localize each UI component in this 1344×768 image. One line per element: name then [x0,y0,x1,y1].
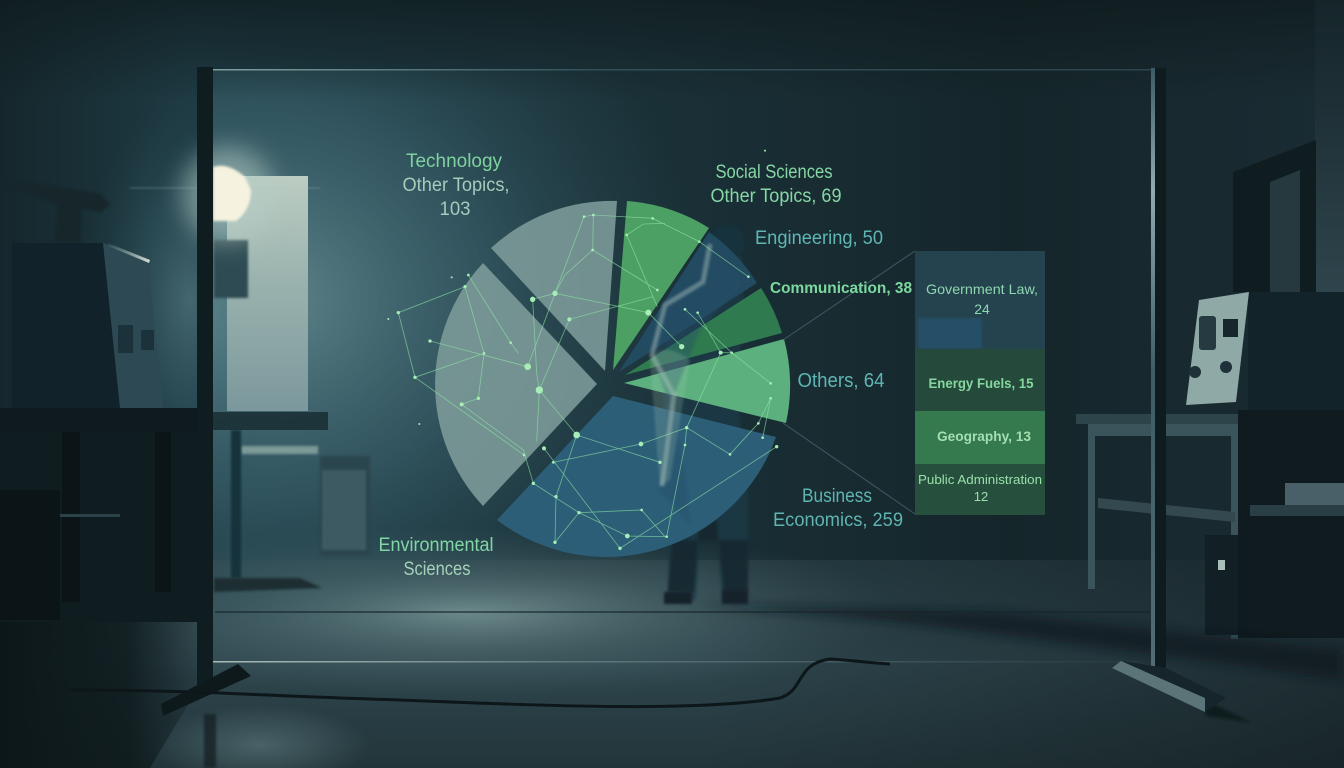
bin [1205,535,1238,635]
table top [1076,414,1246,424]
label: Business Economics: Economics, 259 [773,510,903,531]
right foot dark end [1122,661,1226,712]
space under desk [0,432,197,622]
right equipment [1076,0,1344,639]
slice: Social Sciences Other Topics [613,201,709,370]
person head [709,225,745,261]
network constellation overlay [387,150,778,550]
small wall panel [214,240,248,298]
label: Social Sciences Other Topics: Other Topics, 69 [710,186,842,207]
equipment dark box [12,243,120,412]
device knob [1220,361,1232,373]
label: Environmental Sciences: Environmental [378,535,494,556]
lamp bulb [213,166,251,221]
label: Communication: Communication, 38 [770,280,912,297]
right foot [1112,661,1205,712]
person light reflection [652,244,710,486]
left post [197,67,213,687]
person silhouette [660,225,748,604]
network lines [398,215,777,548]
bar segment: Government Law: Government Law, [926,281,1038,297]
equipment panel highlight [108,243,150,263]
equipment panel [103,243,163,408]
right post highlight [1151,68,1155,680]
device screen [1199,316,1216,350]
table apron [1090,424,1240,436]
slice: Engineering [619,232,757,372]
bar segment: Public Administration [915,464,1045,515]
device body [1248,292,1344,410]
table behind glass [213,412,370,592]
background: glow on glass from lamp [213,70,622,569]
background: floor light pool [10,527,910,697]
frame bottom edge [213,661,1138,662]
lamp horizontal flare [130,187,320,189]
label: Technology Other Topics [402,151,510,220]
person body [660,256,748,600]
right foot shadow [1205,700,1250,722]
background: floor right dark [700,560,1344,768]
person legs [668,520,748,592]
background: top darkening [0,0,1344,100]
label: Technology Other Topics: 103 [440,199,470,220]
person translucent over chart [650,250,744,525]
bin label [1218,560,1225,570]
right post [1155,68,1166,680]
label: Technology Other Topics: Other Topics, [402,175,510,196]
lamp flare halo [182,147,274,243]
background: floor [0,560,1344,768]
lit window panel behind glass [227,176,308,411]
table legs [1088,424,1238,639]
desk shelf glints [60,514,120,517]
zoom connector lines [783,251,915,514]
label: Technology Other Topics: Technology [406,151,502,172]
chart labels [378,151,912,580]
frame top edge [213,69,1155,70]
person shoes [664,590,748,604]
dark right cabinet [1238,410,1344,638]
dark wall frame [1233,140,1316,292]
desk legs and under-desk shadow [0,432,171,620]
frame inner panel [1270,170,1300,292]
cabinet front [322,470,366,550]
person coat overlay [650,350,690,486]
bar segment: Public Administration: Public Administration [918,472,1042,487]
far wall strip [1315,0,1344,292]
table shelf [1098,498,1235,522]
right shelf [1250,505,1344,516]
bar segment: Energy Fuels [915,349,1045,411]
left post reflection [204,714,216,768]
label: Business Economics [773,486,903,531]
floor cable [70,659,890,707]
slice: Communication [625,288,782,375]
bar segment: Government Law: 24 [974,301,990,317]
bar segment: Geography [915,411,1045,464]
left equipment [0,180,197,622]
person shadow on floor [690,604,1344,680]
desk [0,408,197,432]
bar segment: Government Law [915,251,1045,349]
label: Engineering: Engineering, 50 [755,228,883,249]
device panel [1186,292,1249,405]
network nodes [387,150,778,550]
table leg [231,430,241,578]
bar segment: Energy Fuels: Energy Fuels, 15 [928,375,1034,391]
label: Social Sciences Other Topics [710,162,842,207]
device knob left [1189,366,1201,378]
table top [213,412,328,430]
device button [1223,319,1238,337]
bar segment: Geography: Geography, 13 [937,428,1031,444]
background: room wall [0,0,1344,565]
cabinet [320,456,370,556]
slice: Others [624,339,790,423]
chart: exploded pie [435,201,790,557]
background: glow left of post [80,90,300,510]
bar segment: Public Administration: 12 [974,489,988,504]
slice: Environmental Sciences [435,263,597,506]
floor line [215,611,1150,613]
label: Environmental Sciences [378,535,494,580]
slice: Technology Other Topics [491,201,617,371]
lit bar [241,446,318,454]
stacked bar breakdown [915,251,1045,515]
equipment panel switches [118,325,154,353]
slice: Business Economics [497,396,776,557]
label: Others: Others, 64 [798,370,884,392]
glass frame [161,67,1250,768]
label: Environmental Sciences: Sciences [404,559,470,580]
background: floor reflection near left foot [150,705,370,768]
equipment arm [0,181,110,243]
left foot [161,664,251,716]
right lit object [1285,483,1344,505]
label: Social Sciences Other Topics: Social Sciences [716,162,832,183]
label: Business Economics: Business [802,486,872,507]
background: floor far left dark [0,560,215,768]
stand base [214,578,322,592]
equipment pole [3,180,12,412]
